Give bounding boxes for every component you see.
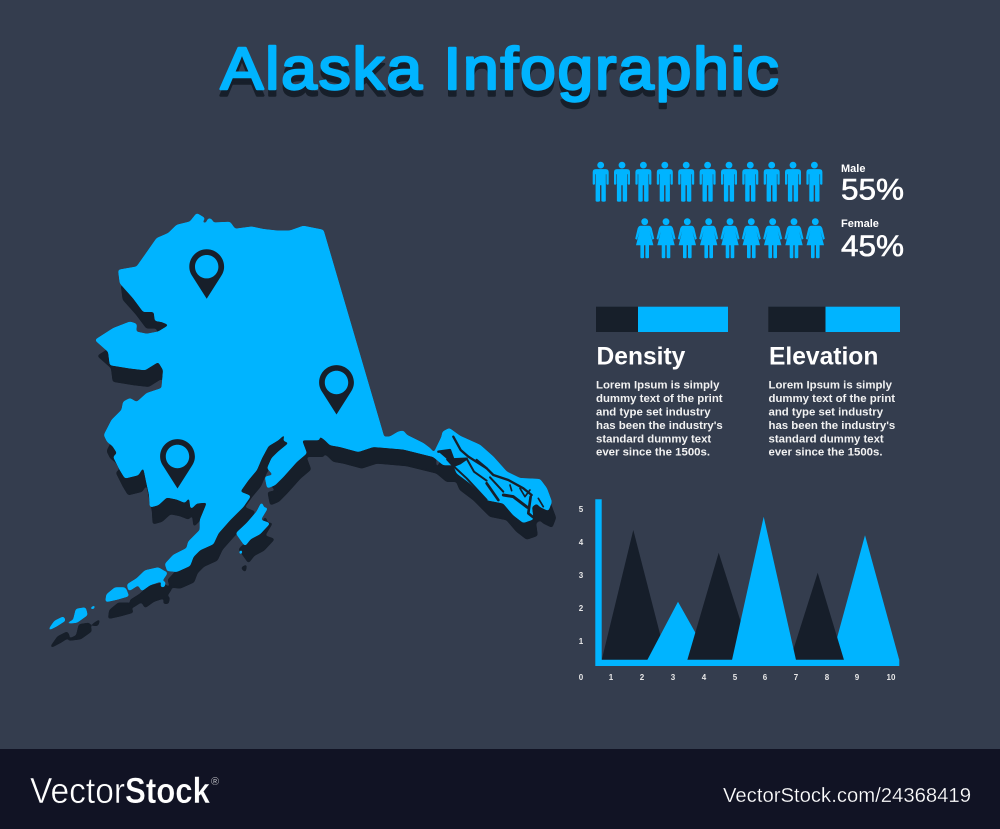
chart x axis labels: 10 [887, 673, 896, 682]
density heading: Density [596, 344, 686, 370]
panel: density [596, 307, 728, 459]
chart x axis labels: 9 [855, 673, 860, 682]
density text: has been the industry's [596, 420, 723, 432]
chart y axis labels: 4 [579, 538, 584, 547]
female icon row [635, 218, 825, 258]
title: Alaska Infographic [220, 42, 780, 108]
elevation text: Lorem Ipsum is simply [768, 380, 893, 392]
density text: ever since the 1500s. [596, 447, 710, 459]
density text: standard dummy text [596, 433, 711, 445]
map pin: north [189, 249, 224, 299]
density text: Lorem Ipsum is simply [596, 380, 720, 392]
chart x axis labels: 2 [640, 673, 645, 682]
chart x axis labels: 1 [609, 673, 614, 682]
footer logo [30, 770, 219, 811]
chart y axis labels: 2 [579, 604, 584, 613]
female label: 45% [841, 230, 904, 263]
chart triangles [602, 517, 899, 660]
female label [841, 218, 904, 263]
footer logo: ® [211, 776, 219, 788]
female label: Female [841, 218, 879, 230]
chart y axis labels: 5 [579, 505, 584, 514]
footer logo: Vector [30, 770, 125, 811]
footer logo: Stock [125, 770, 211, 811]
footer id: VectorStock.com/24368419 [723, 785, 971, 807]
chart y axis labels [579, 505, 584, 646]
chart x axis labels: 8 [825, 673, 830, 682]
chart x axis labels: 6 [763, 673, 768, 682]
chart x axis labels: 0 [579, 673, 584, 682]
density bar [596, 307, 728, 332]
elevation heading: Elevation [769, 344, 878, 370]
chart x axis labels: 4 [702, 673, 707, 682]
chart y axis labels: 1 [579, 637, 584, 646]
map land [48, 213, 552, 631]
male label: Male [841, 163, 865, 175]
chart x axis labels [579, 673, 896, 682]
map: Alaska [48, 213, 555, 647]
density text: dummy text of the print [596, 393, 723, 405]
male label: 55% [841, 174, 904, 206]
footer band [0, 749, 1000, 829]
male icon row [593, 162, 822, 202]
panel: elevation [768, 307, 900, 459]
elevation text: and type set industry [768, 406, 884, 418]
elevation text: dummy text of the print [768, 393, 895, 405]
chart x axis labels: 3 [671, 673, 676, 682]
map pin: east [319, 365, 354, 414]
panhandle channels [438, 437, 543, 520]
chart axes [595, 499, 899, 666]
chart x axis labels: 7 [794, 673, 799, 682]
title: Alaska Infographic [220, 36, 780, 102]
elevation text: ever since the 1500s. [768, 447, 882, 459]
elevation text: standard dummy text [768, 433, 884, 445]
chart x axis labels: 5 [733, 673, 738, 682]
elevation text: has been the industry's [768, 420, 895, 432]
elevation bar [768, 307, 900, 332]
map pin: southwest [160, 439, 195, 488]
triangle chart [579, 499, 899, 682]
chart y axis labels: 3 [579, 571, 584, 580]
density text: and type set industry [596, 406, 711, 418]
map shadow [51, 229, 555, 647]
